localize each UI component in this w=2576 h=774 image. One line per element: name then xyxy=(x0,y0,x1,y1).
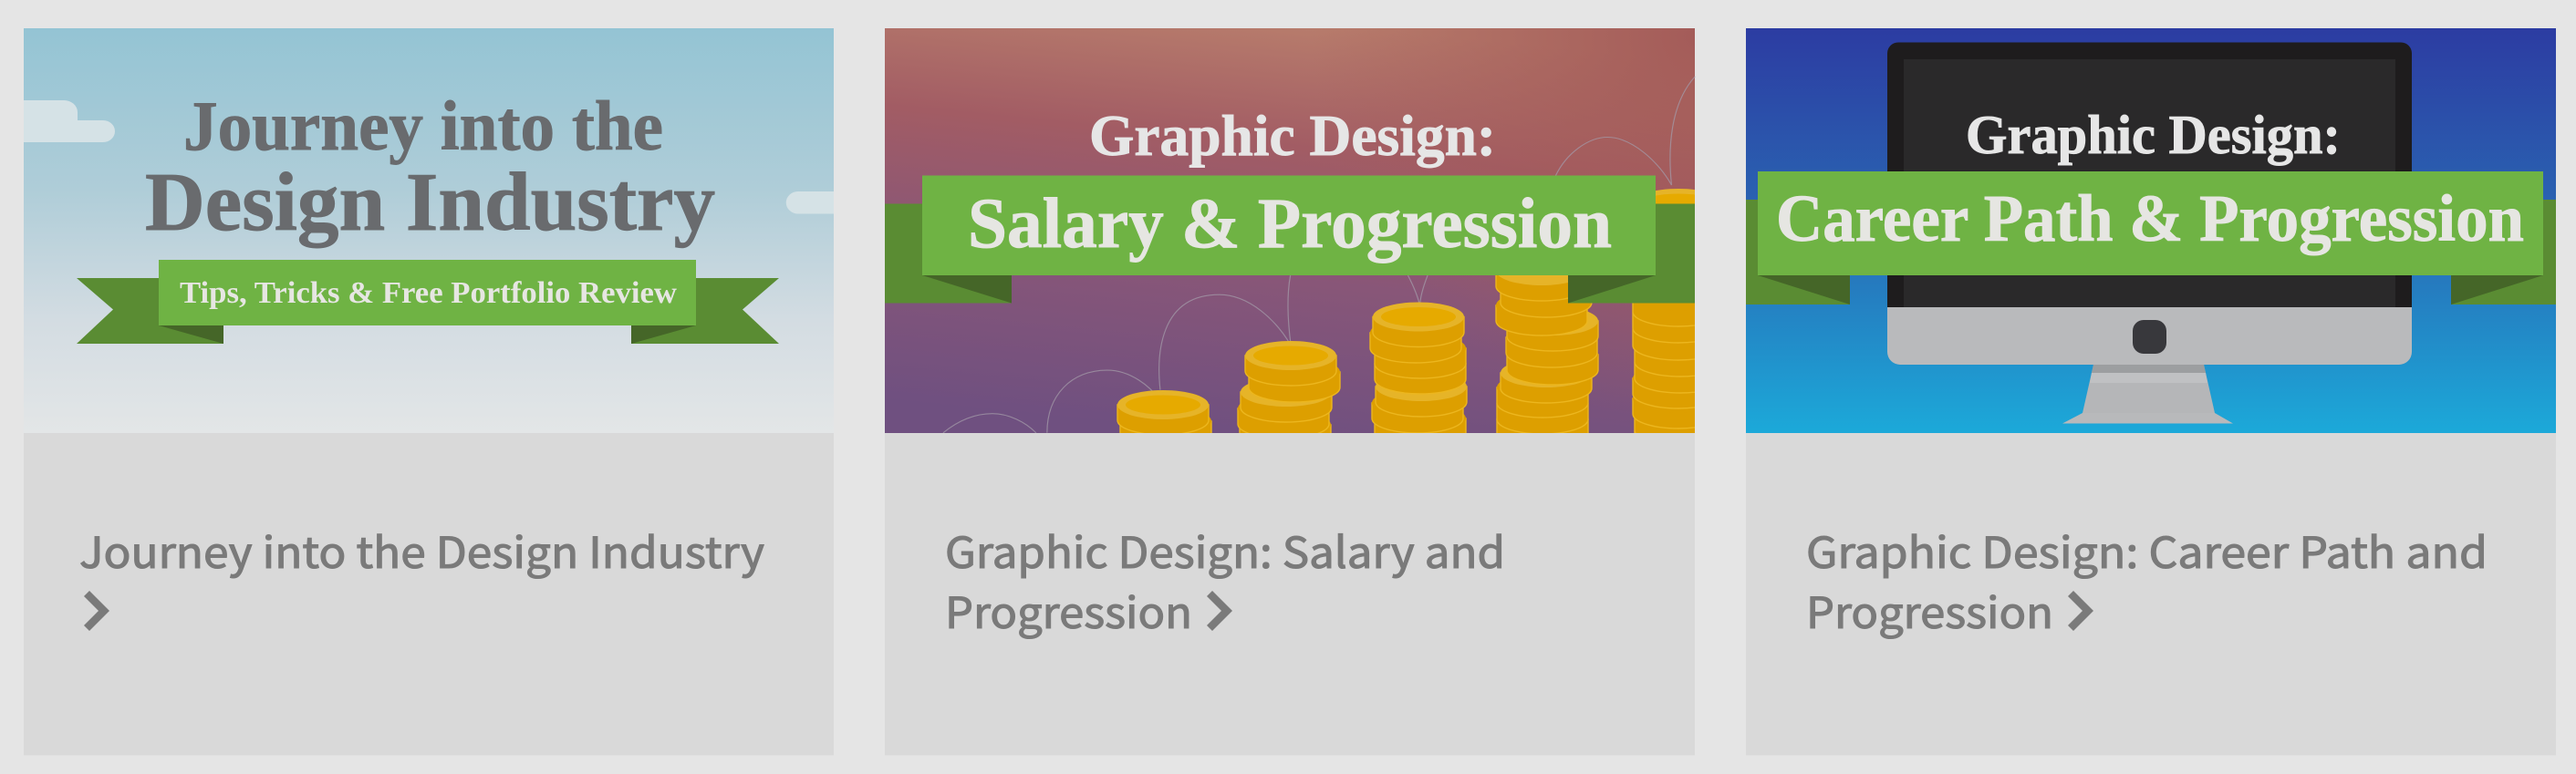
caption box xyxy=(24,433,834,755)
icon: chevron xyxy=(2068,591,2093,631)
ribbon banner xyxy=(1758,171,2543,275)
icon: right cloud xyxy=(786,191,834,213)
ribbon right tail xyxy=(2451,200,2556,304)
dusk corner shading xyxy=(885,28,1695,433)
coin stack 5 xyxy=(1632,189,1695,433)
panel: Graphic Design Salary and Progression xyxy=(885,28,1726,755)
title line one: Journey into the xyxy=(183,87,663,165)
monitor screen xyxy=(1904,59,2395,307)
ribbon left fold xyxy=(159,325,223,344)
icon: chevron xyxy=(84,591,109,631)
card image background: dusk gradient xyxy=(885,28,1695,433)
coin stacks xyxy=(1117,189,1726,461)
monitor stand xyxy=(2083,365,2215,413)
ribbon title: Salary & Progression xyxy=(968,183,1612,263)
ribbon right fold xyxy=(2451,275,2543,304)
monitor foot xyxy=(2062,413,2233,423)
caption box xyxy=(885,433,1695,755)
coin stack 3 xyxy=(1370,303,1467,449)
ribbon title: Career Path & Progression xyxy=(1776,181,2524,255)
ribbon right tail xyxy=(631,278,779,344)
ribbon left tail xyxy=(885,204,1012,303)
subtitle: Graphic Design: xyxy=(1966,105,2341,165)
ribbon right fold xyxy=(1568,275,1656,303)
caption line two: Progression xyxy=(1806,578,2053,641)
ribbon subtitle: Tips, Tricks & Free Portfolio Review xyxy=(180,276,677,310)
falling coin trails xyxy=(943,77,1695,433)
ribbon left tail xyxy=(1746,200,1850,304)
monitor stand highlight xyxy=(2090,373,2207,383)
icon: desktop monitor xyxy=(1887,42,2412,423)
caption line two: Progression xyxy=(945,578,1192,641)
caption line one: Graphic Design: Career Path and xyxy=(1806,518,2488,581)
monitor stand shadow xyxy=(2092,365,2206,373)
panel: Graphic Design Career Path and Progression xyxy=(1746,28,2556,755)
ribbon right fold xyxy=(631,325,696,344)
ribbon right tail xyxy=(1568,204,1695,303)
monitor bezel xyxy=(1887,42,2412,307)
subtitle: Graphic Design: xyxy=(1089,103,1496,168)
ribbon banner xyxy=(159,260,696,325)
caption text: Journey into the Design Industry xyxy=(79,518,764,581)
coin stack 2 xyxy=(1237,341,1341,433)
ribbon banner xyxy=(922,175,1656,275)
ribbon left fold xyxy=(1758,275,1850,304)
card image background: sky xyxy=(24,28,834,433)
ribbon left fold xyxy=(922,275,1012,303)
caption line one: Graphic Design: Salary and xyxy=(945,518,1505,581)
coin stack 1 xyxy=(1117,390,1212,433)
monitor chin xyxy=(1887,307,2412,365)
coin stack 4 xyxy=(1495,275,1599,433)
monitor button xyxy=(2133,320,2166,354)
caption box xyxy=(1746,433,2556,755)
panel: Journey into the Design Industry xyxy=(24,28,834,755)
card image background: blue gradient xyxy=(1746,28,2556,433)
icon: left cloud xyxy=(24,100,115,142)
icon: chevron xyxy=(1207,591,1232,631)
title line two: Design Industry xyxy=(145,156,715,248)
ribbon left tail xyxy=(77,278,223,344)
